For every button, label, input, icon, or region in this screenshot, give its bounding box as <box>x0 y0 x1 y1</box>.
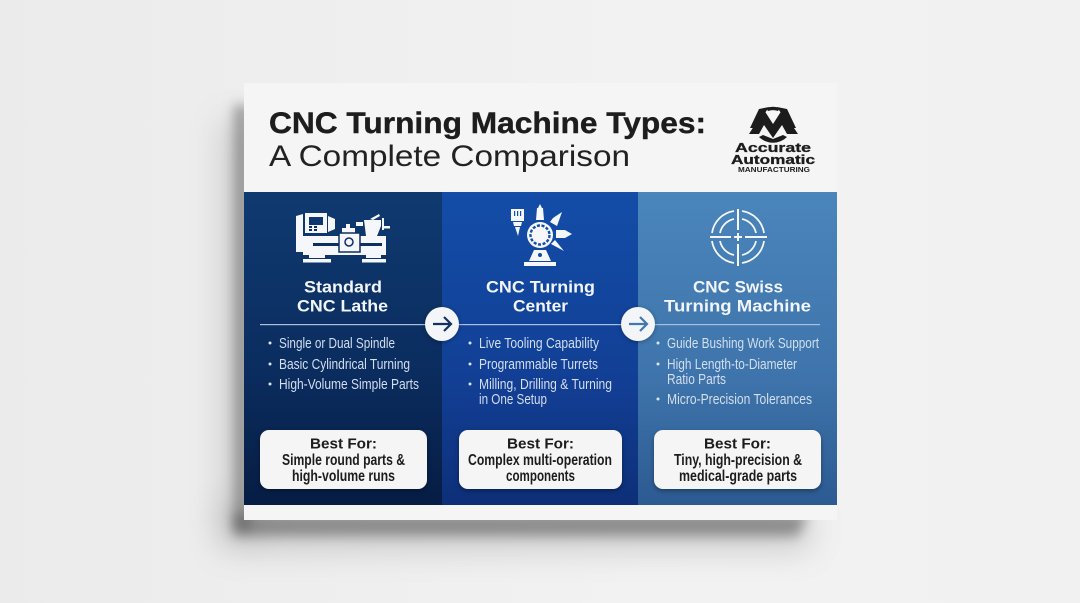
header title: A Complete Comparison <box>269 140 630 173</box>
feature list: Single or Dual Spindle <box>279 335 395 352</box>
arrow: turning center to Swiss machine <box>621 307 655 342</box>
column heading: Standard <box>304 278 382 296</box>
column: Standard CNC Lathe <box>244 192 442 505</box>
feature list: Programmable Turrets <box>479 356 598 373</box>
best for card <box>459 430 622 491</box>
feature list: in One Setup <box>479 391 547 408</box>
icon: crosshair target <box>710 209 767 266</box>
feature list <box>268 335 419 393</box>
column heading <box>297 278 388 316</box>
best for card <box>654 430 821 491</box>
column heading: CNC Lathe <box>297 296 388 316</box>
company logo: Automatic <box>731 152 815 167</box>
feature list: Basic Cylindrical Turning <box>279 356 410 373</box>
feature list: Ratio Parts <box>667 371 726 388</box>
best for card: Complex multi-operation <box>468 452 612 469</box>
poster card <box>244 83 837 520</box>
feature list: Live Tooling Capability <box>479 335 599 352</box>
header title: CNC Turning Machine Types: <box>269 107 706 140</box>
feature list <box>656 335 820 408</box>
feature list: Micro-Precision Tolerances <box>667 391 812 408</box>
best for card: Best For: <box>507 436 574 452</box>
best for card: medical-grade parts <box>679 468 797 485</box>
arrow: lathe to turning center <box>425 307 459 342</box>
best for card: high-volume runs <box>292 468 395 485</box>
column heading: Center <box>513 296 568 316</box>
best for card: components <box>506 468 575 485</box>
feature list <box>468 335 612 408</box>
column heading: Turning Machine <box>664 296 811 316</box>
column heading: CNC Turning <box>486 278 595 296</box>
icon: turret <box>511 204 572 266</box>
column heading <box>664 278 811 316</box>
feature list: High-Volume Simple Parts <box>279 376 419 393</box>
header title <box>269 107 706 173</box>
column heading: CNC Swiss <box>693 278 783 296</box>
best for card: Simple round parts & <box>282 452 405 469</box>
company logo: MANUFACTURING <box>738 167 811 174</box>
best for card: Tiny, high-precision & <box>674 452 802 469</box>
best for card: Best For: <box>704 436 771 452</box>
best for card <box>260 430 427 491</box>
logo mark <box>749 107 798 143</box>
best for card: Best For: <box>310 436 377 452</box>
feature list: Milling, Drilling & Turning <box>479 376 612 393</box>
column heading <box>486 278 595 316</box>
column: CNC Turning Center <box>442 192 638 505</box>
feature list: High Length-to-Diameter <box>667 356 797 373</box>
feature list: Guide Bushing Work Support <box>667 335 820 352</box>
company logo: Accurate <box>735 140 811 155</box>
company logo <box>731 107 815 174</box>
column: CNC Swiss Turning Machine <box>638 192 837 505</box>
icon: lathe <box>296 213 390 262</box>
